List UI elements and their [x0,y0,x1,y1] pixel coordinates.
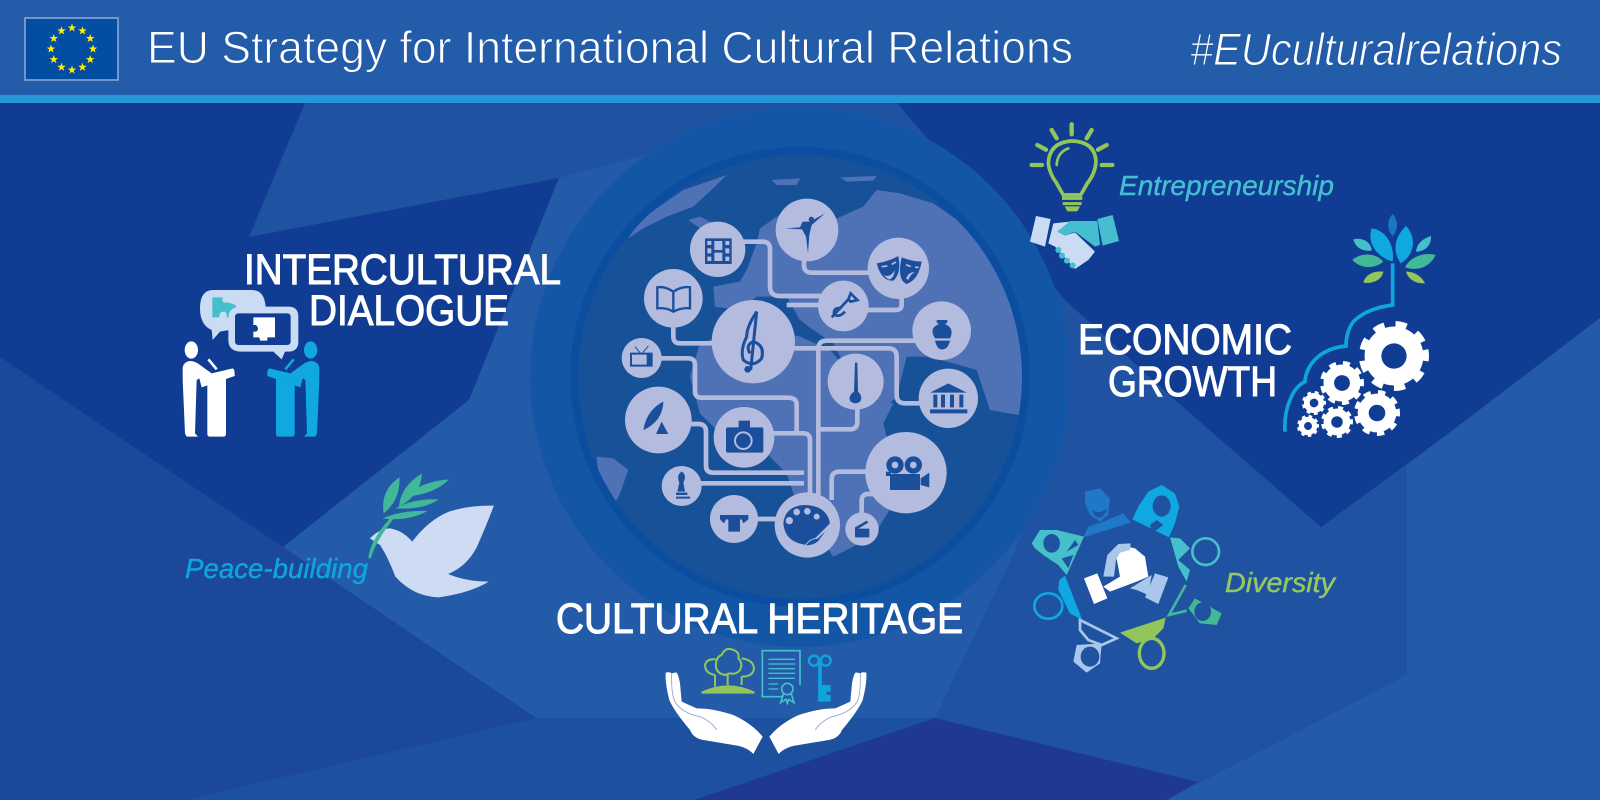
section: diversity [1032,485,1337,673]
icon: vase [932,320,952,349]
person lower right [1169,585,1222,625]
icon: open book [657,287,690,312]
globe rings [530,107,1070,647]
section: economic growth [1078,214,1436,438]
icon: treble clef [742,312,762,373]
icon: camera [726,421,763,453]
icon: guitar [850,363,861,403]
hashtag: #EUculturalrelations [1190,24,1562,75]
person left [1034,576,1082,620]
icon: circle of people [1032,485,1222,673]
icon: quill and ink [643,402,668,434]
EU flag [25,18,118,80]
icon: light bulb [1032,124,1112,211]
icon: clapperboard [855,521,869,537]
label: Entrepreneurship [1119,170,1334,201]
icon: theatre masks [877,256,922,284]
section: peace-building [185,473,494,597]
label: Diversity [1225,567,1337,598]
icon: speech bubble with teal puzzle piece [200,290,266,340]
icon: tree [702,649,754,693]
heading: DIALOGUE [309,287,509,335]
heading: GROWTH [1108,358,1277,406]
icon: TV [630,346,653,367]
person upper left [1032,530,1084,575]
icon: speech bubble with white puzzle piece [228,307,298,359]
heading: INTERCULTURAL [244,246,561,294]
section: entrepreneurship [1030,124,1334,269]
person bottom left [1073,620,1117,673]
clasped hands [1084,543,1168,604]
icon: plant growing from cloud [1285,214,1436,432]
person bottom [1120,618,1166,668]
icon: column [720,515,748,532]
connector lines [658,242,923,519]
header bar [0,0,1600,103]
icon: film strip [705,238,732,264]
icon: handshake [1030,215,1119,269]
label: Peace-building [185,553,368,584]
speakers and speech bubbles [183,290,319,437]
heading: ECONOMIC [1078,316,1292,364]
icon: dove with olive branch [368,473,494,597]
icon: paint brush [805,522,836,546]
icon: blue speaker at podium [267,341,319,437]
world map land [597,175,1067,557]
icon: open hands [666,672,866,754]
icon: white speaker at podium [183,341,235,437]
icon: movie camera [886,456,929,490]
icon: ballet dancer [785,213,825,253]
section: intercultural dialogue [183,246,561,437]
icon: gears [1297,321,1429,438]
icon: key [809,656,831,702]
heading: CULTURAL HERITAGE [556,595,963,643]
icon: palette [783,505,830,545]
icon circles [622,199,978,558]
person top left [1083,488,1131,537]
person top [1132,485,1179,537]
circle icons [630,213,967,546]
person upper right [1170,537,1219,582]
section: cultural heritage [556,595,963,754]
central globe with culture network [530,107,1070,647]
network diagram [597,175,1067,558]
icon: bust [676,472,690,499]
icon: trumpet [832,293,857,317]
title: EU Strategy for International Cultural Relations [147,22,1073,73]
icon: temple [930,383,967,413]
icon: certificate [762,651,800,703]
